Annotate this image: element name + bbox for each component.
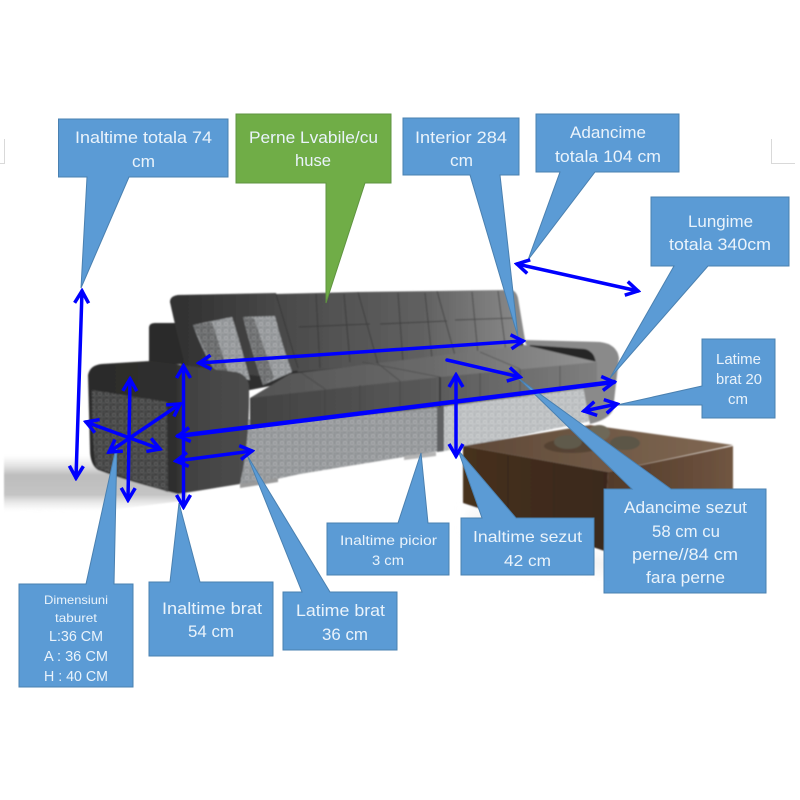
arrow: seat height xyxy=(454,375,458,456)
ottoman xyxy=(92,390,168,492)
callout: Inaltime sezut: Inaltime sezut xyxy=(473,529,583,546)
callout: Lungime totala xyxy=(610,197,789,378)
callout: Adancime sezut: perne//84 cm xyxy=(632,546,738,564)
callout: Dimensiuni taburet: H : 40 CM xyxy=(44,669,108,685)
sofa photo xyxy=(4,290,740,572)
callout: Interior xyxy=(403,118,519,337)
left arm xyxy=(88,361,249,494)
floor shadow xyxy=(3,456,604,570)
callout: Dimensiuni taburet: A : 36 CM xyxy=(44,649,108,665)
sofa legs xyxy=(240,478,278,488)
callout: Inaltime brat xyxy=(149,503,273,656)
back cushions xyxy=(170,290,525,376)
dark backing behind pillows xyxy=(176,300,525,392)
callout: Adancime sezut: Adancime sezut xyxy=(624,499,747,517)
arrow: arm width 20 xyxy=(584,404,617,411)
callout: Adancime sezut: fara perne xyxy=(646,569,725,587)
arrow: total length xyxy=(178,382,614,436)
callout: Adancime totala: Adancime xyxy=(570,124,646,142)
infographic xyxy=(0,114,795,688)
arrow: total depth xyxy=(517,264,638,291)
callout: Inaltime sezut xyxy=(458,450,594,575)
callout: Inaltime brat: Inaltime brat xyxy=(162,600,262,618)
callout: Latime brat 20: brat 20 xyxy=(716,372,762,388)
callout: Perne lavabile (green): Perne Lvabile/cu xyxy=(249,129,378,147)
callout: Interior: Interior 284 xyxy=(415,129,507,147)
callout: Adancime totala xyxy=(528,114,679,260)
seat cushions xyxy=(250,345,597,427)
callout: Inaltime picior xyxy=(327,453,449,575)
arrow: ottoman width xyxy=(109,404,180,452)
pillows xyxy=(193,316,292,385)
callout: Adancime sezut: 58 cm cu xyxy=(652,523,720,541)
callout: Inaltime totala: cm xyxy=(132,153,155,171)
callout: Latime brat 36: Latime brat xyxy=(296,602,385,620)
callout: Inaltime picior: Inaltime picior xyxy=(340,533,438,548)
arrow: arm height xyxy=(182,366,185,507)
callout: Perne lavabile (green) xyxy=(236,114,391,303)
arrow: total height xyxy=(76,291,82,478)
page corner marks xyxy=(0,139,795,164)
arrow: ottoman height xyxy=(128,379,130,500)
callout: Latime brat 36: 36 cm xyxy=(322,626,368,644)
back bolster xyxy=(149,323,184,366)
fabric base xyxy=(240,380,600,487)
callout: Adancime totala: totala 104 cm xyxy=(555,148,661,166)
callout: Latime brat 20: Latime xyxy=(716,352,761,368)
callout: Latime brat 20: cm xyxy=(728,392,748,408)
right arm xyxy=(524,340,619,424)
callout: Latime brat 20 xyxy=(617,339,775,418)
callout: Inaltime totala xyxy=(58,119,228,288)
callout: Lungime totala: Lungime xyxy=(688,213,753,231)
callout: Interior: cm xyxy=(450,152,473,170)
callout: Dimensiuni taburet: Dimensiuni xyxy=(44,593,108,607)
callout: Latime brat 36 xyxy=(247,455,397,650)
callout: Perne lavabile (green): huse xyxy=(295,152,331,170)
callout: Inaltime picior: 3 cm xyxy=(372,553,404,568)
callout: Inaltime sezut: 42 cm xyxy=(504,553,551,570)
stones xyxy=(544,439,600,453)
callout: Adancime sezut xyxy=(518,378,766,593)
callout: Dimensiuni taburet: L:36 CM xyxy=(49,629,103,645)
arrow: arm width 36 xyxy=(176,451,252,461)
callout: Dimensiuni taburet xyxy=(19,443,133,687)
arrow: interior length xyxy=(199,341,523,363)
callout: Dimensiuni taburet: taburet xyxy=(55,611,98,625)
callout: Inaltime brat: 54 cm xyxy=(188,623,234,641)
callout: Lungime totala: totala 340cm xyxy=(669,236,771,254)
arrow: ottoman length xyxy=(86,422,160,449)
arrow: seat depth xyxy=(447,360,520,377)
callout: Inaltime totala: Inaltime totala 74 xyxy=(75,129,212,147)
coffee table xyxy=(463,425,733,551)
